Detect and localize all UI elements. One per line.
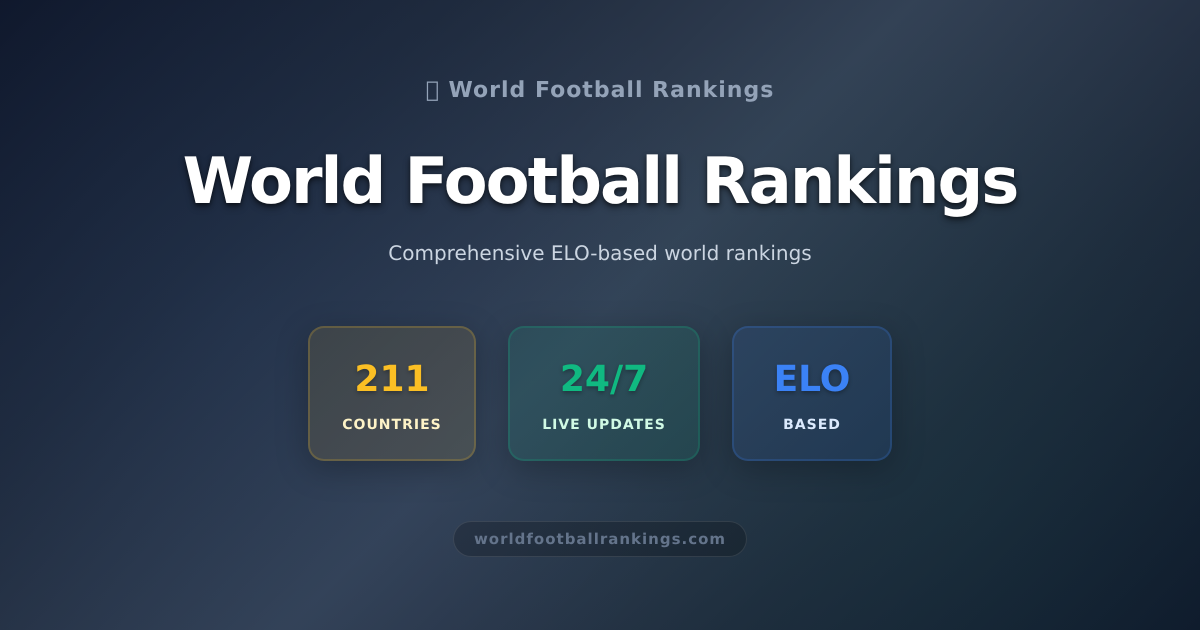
stat label: countries: COUNTRIES xyxy=(342,417,442,433)
stat number: ELO: ELO xyxy=(774,359,850,400)
panel: live updates stat xyxy=(508,326,700,461)
panel: ELO based stat xyxy=(732,326,892,461)
stat label: live updates: LIVE UPDATES xyxy=(542,417,666,433)
title: World Football Rankings xyxy=(183,145,1017,219)
website url pill: worldfootballrankings.com xyxy=(474,530,726,548)
website url pill xyxy=(453,521,747,557)
stat label: based: BASED xyxy=(783,417,841,433)
eyebrow heading with missing-glyph icon: 􏿽 World Football Rankings xyxy=(426,78,774,103)
stat number: 24/7: 24/7 xyxy=(560,359,648,400)
panel: countries stat xyxy=(308,326,476,461)
stat number: 211: 211 xyxy=(354,359,430,400)
subtitle: Comprehensive ELO-based world rankings xyxy=(388,241,812,265)
